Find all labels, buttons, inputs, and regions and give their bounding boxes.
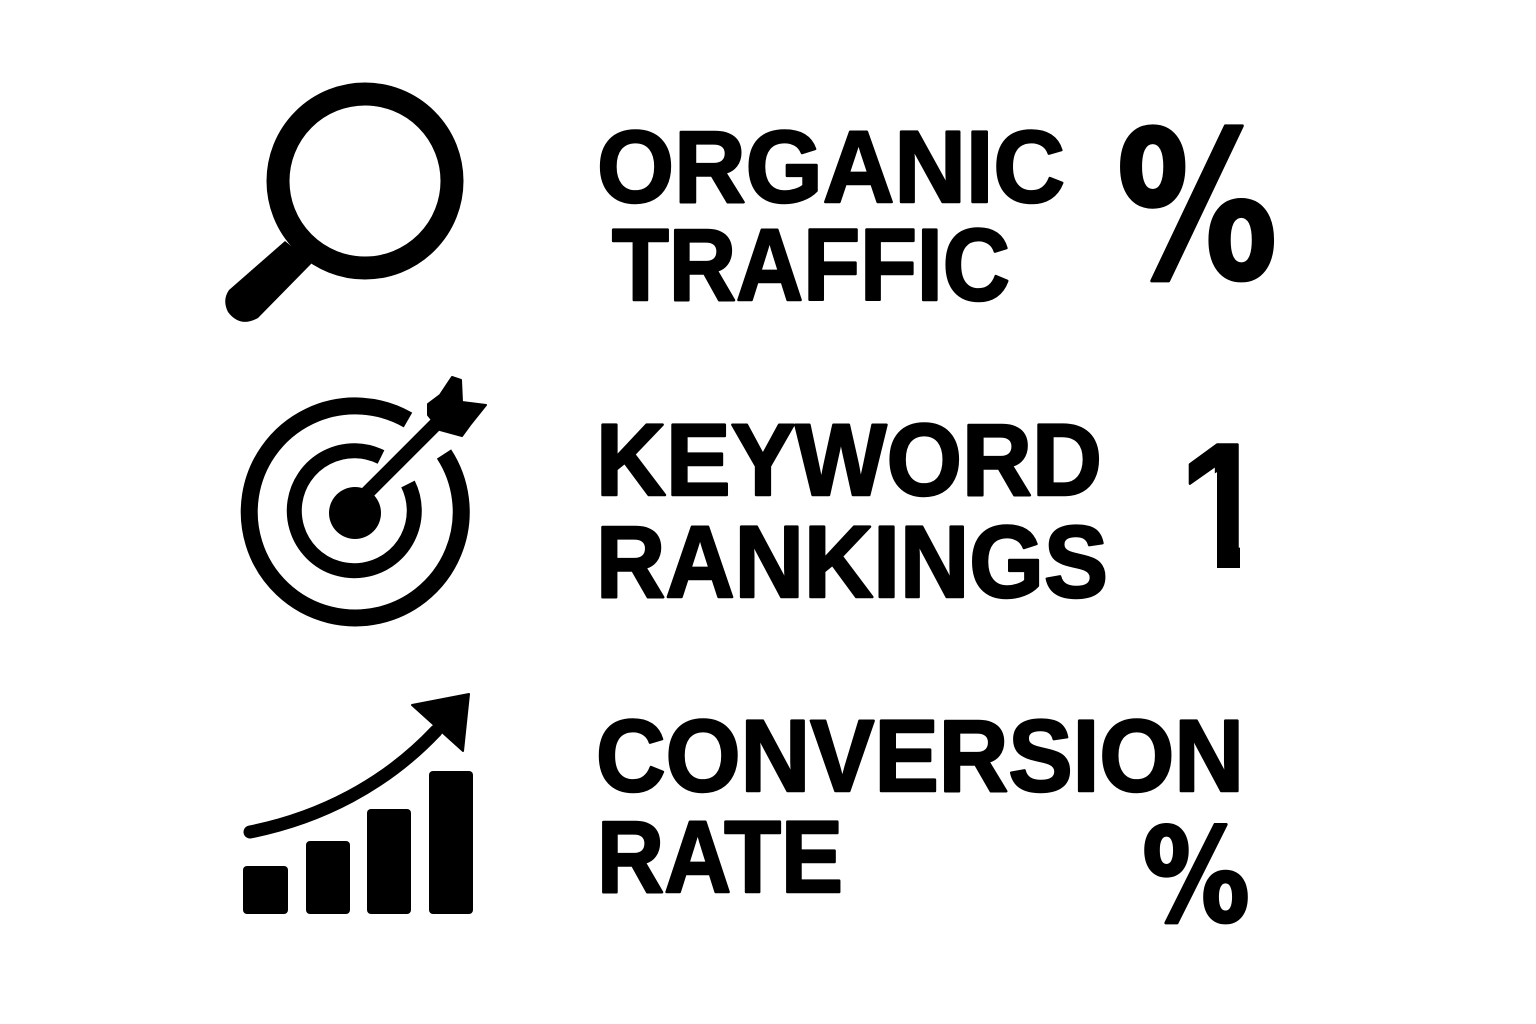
heading: organic traffic: TRAFFIC — [612, 208, 1010, 322]
heading: keyword rankings: KEYWORD — [596, 403, 1102, 517]
heading: conversion rate: RATE — [597, 800, 843, 914]
symbol: percent, conversion rate: % — [1142, 800, 1250, 952]
symbol: percent, organic traffic: % — [1116, 89, 1278, 327]
heading: keyword rankings: RANKINGS — [596, 505, 1108, 619]
heading: organic traffic: ORGANIC — [597, 110, 1065, 224]
heading: conversion rate — [596, 699, 1244, 914]
icon: rising bar chart with arrow — [243, 694, 473, 914]
heading: organic traffic — [597, 110, 1065, 322]
icon: target with arrow — [249, 377, 486, 618]
heading: conversion rate: CONVERSION — [596, 699, 1244, 813]
number: one: 1 — [1179, 406, 1267, 605]
icon: magnifying glass — [225, 94, 452, 322]
heading: keyword rankings — [596, 403, 1108, 619]
